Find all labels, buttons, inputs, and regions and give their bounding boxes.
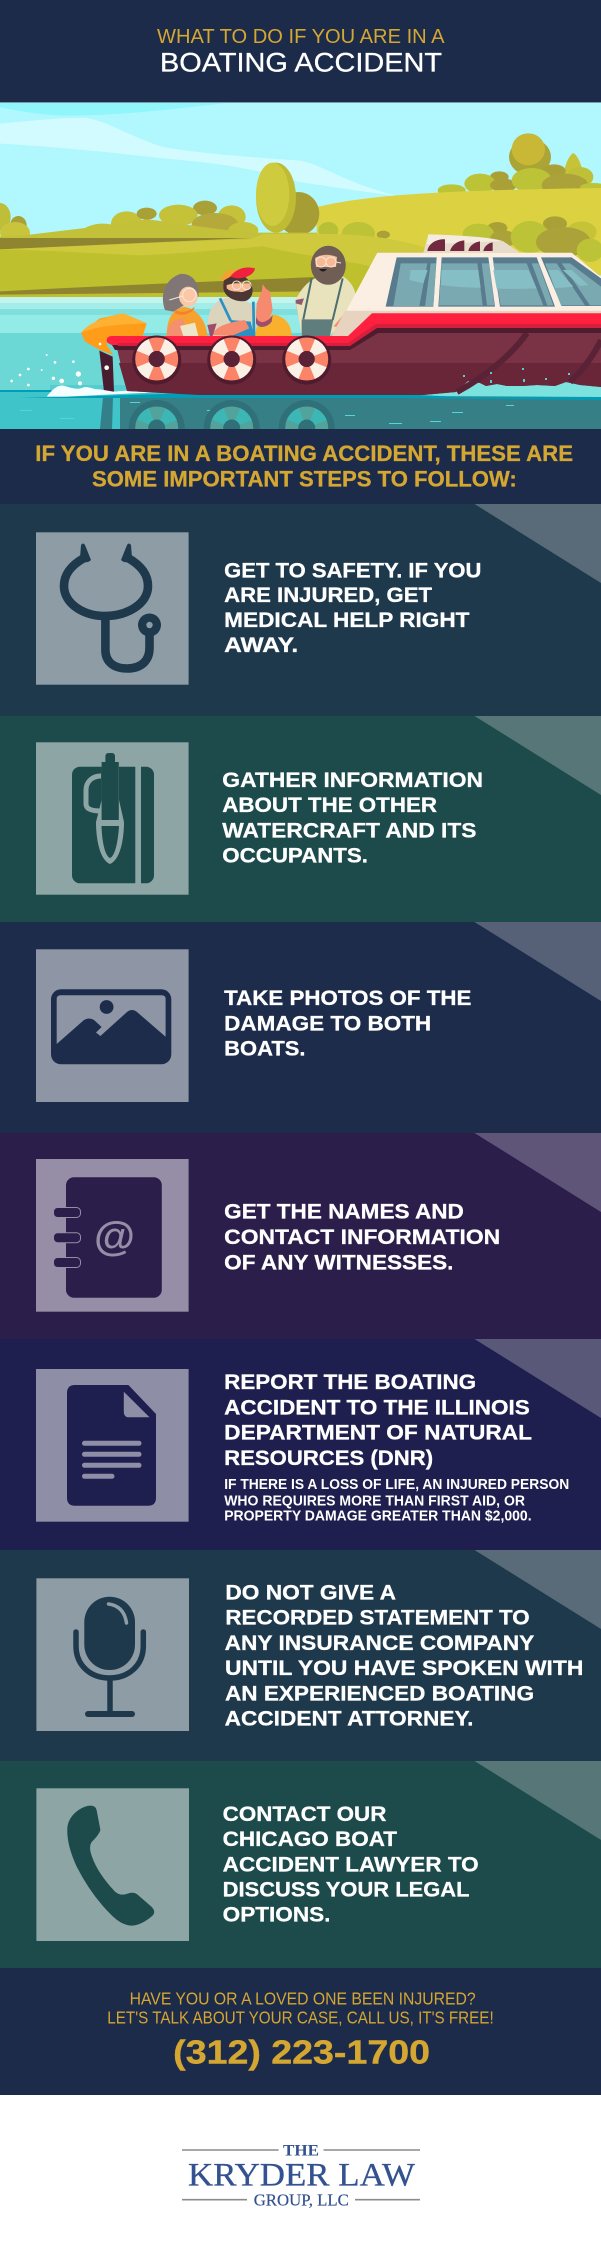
call to action text: LET'S TALK ABOUT YOUR CASE, CALL US, IT'S FREE! (107, 2007, 494, 2027)
icon: notebook and pen (72, 753, 154, 887)
passenger: bearded man (296, 277, 356, 336)
step 3 text: BOATS. (224, 1037, 306, 1061)
step 5 text: WHO REQUIRES MORE THAN FIRST AID, OR (224, 1493, 526, 1509)
step 3 text (224, 986, 471, 1061)
title: BOATING ACCIDENT (160, 48, 442, 78)
icon: address book (54, 1177, 162, 1298)
step 1 text: ARE INJURED, GET (224, 583, 432, 607)
step 5 text (224, 1370, 569, 1524)
passenger: man with red cap (207, 267, 292, 336)
step 2 text: OCCUPANTS. (222, 844, 368, 868)
heading: SOME IMPORTANT STEPS TO FOLLOW: (92, 467, 517, 492)
panel: step 6 recorded statement (0, 1550, 601, 1761)
step 2 text: ABOUT THE OTHER (222, 793, 437, 817)
step 4 text: GET THE NAMES AND (224, 1199, 464, 1223)
step 5 text: RESOURCES (DNR) (224, 1446, 433, 1470)
icon: address book: @ (94, 1213, 135, 1259)
panel: step 3 take photos (0, 922, 601, 1133)
phone number: (312) 223-1700 (173, 2034, 430, 2071)
ring reflections (128, 400, 334, 429)
step 1 text (224, 558, 481, 657)
step 5 text: REPORT THE BOATING (224, 1370, 476, 1394)
step 7 text: OPTIONS. (223, 1903, 330, 1927)
hull (112, 320, 601, 395)
step 4 text: OF ANY WITNESSES. (224, 1250, 453, 1274)
cabin windows (386, 257, 601, 307)
heading: IF YOU ARE IN A BOATING ACCIDENT, THESE ARE (35, 441, 573, 466)
life ring 2 (207, 336, 256, 384)
life ring 3 (282, 336, 331, 384)
step 5 text: ACCIDENT TO THE ILLINOIS (224, 1396, 530, 1420)
step 2 text (222, 768, 483, 868)
logo: The Kryder Law Group (182, 2143, 420, 2210)
step 7 text: ACCIDENT LAWYER TO (223, 1853, 479, 1877)
step 1 text: GET TO SAFETY. IF YOU (224, 558, 481, 582)
cabin roof (423, 234, 520, 253)
step 4 text: CONTACT INFORMATION (224, 1225, 500, 1249)
sky clouds and left shrubs (0, 103, 397, 243)
step 5 text: PROPERTY DAMAGE GREATER THAN $2,000. (224, 1508, 532, 1524)
call to action band (0, 1968, 601, 2095)
panel: step 5 report the accident (0, 1339, 601, 1550)
trees and near hills (0, 163, 433, 297)
step 6 text: ANY INSURANCE COMPANY (225, 1631, 534, 1655)
passengers (163, 267, 356, 336)
step 2 text: GATHER INFORMATION (222, 768, 483, 792)
red gunwale stripe (107, 313, 601, 346)
step 6 text: AN EXPERIENCED BOATING (225, 1681, 534, 1705)
cabin body (345, 253, 601, 313)
heading (35, 441, 573, 492)
panel: step 1 get to safety (0, 504, 601, 716)
motor boat (107, 234, 601, 395)
panel: step 7 contact lawyer (0, 1761, 601, 1968)
step 6 text: DO NOT GIVE A (225, 1580, 396, 1604)
step 4 text (224, 1199, 500, 1274)
call to action text (107, 1989, 494, 2027)
icon: stethoscope (64, 544, 161, 668)
step 1 text: AWAY. (224, 633, 298, 657)
step 1 text: MEDICAL HELP RIGHT (224, 608, 470, 632)
step 7 text: CHICAGO BOAT (223, 1827, 397, 1851)
passenger: woman (163, 274, 207, 336)
head of bearded man (311, 246, 346, 285)
step 6 text: ACCIDENT ATTORNEY. (225, 1707, 473, 1731)
logo: The Kryder Law Group: GROUP, LLC (254, 2191, 349, 2210)
step 6 text: UNTIL YOU HAVE SPOKEN WITH (225, 1656, 583, 1680)
icon: picture (51, 989, 171, 1064)
outboard motor and splash (10, 313, 154, 397)
step 5 text: IF THERE IS A LOSS OF LIFE, AN INJURED PERSON (224, 1477, 569, 1493)
far right hills and shrubs (317, 133, 601, 275)
panel: step 2 gather information (0, 716, 601, 922)
step 5 text: DEPARTMENT OF NATURAL (224, 1421, 532, 1445)
hero illustration: boat on a lake (0, 102, 601, 456)
life ring 1 (132, 336, 181, 384)
step 2 text: WATERCRAFT AND ITS (222, 819, 476, 843)
step 3 text: TAKE PHOTOS OF THE (224, 986, 471, 1010)
logo: The Kryder Law Group: KRYDER LAW (188, 2157, 415, 2193)
step 7 text (223, 1802, 479, 1927)
logo: The Kryder Law Group: THE (283, 2143, 319, 2160)
title: WHAT TO DO IF YOU ARE IN A (157, 26, 445, 48)
icon: telephone (67, 1806, 154, 1926)
step 7 text: DISCUSS YOUR LEGAL (223, 1878, 470, 1902)
icon: microphone (76, 1597, 143, 1714)
icon: document (67, 1385, 156, 1506)
panel: step 4 witnesses (0, 1133, 601, 1339)
step 3 text: DAMAGE TO BOTH (224, 1012, 431, 1036)
call to action text: HAVE YOU OR A LOVED ONE BEEN INJURED? (130, 1989, 476, 2009)
step 6 text: RECORDED STATEMENT TO (225, 1605, 530, 1629)
header banner (0, 0, 601, 102)
title (157, 26, 445, 78)
step 6 text (225, 1580, 583, 1731)
water (0, 297, 601, 429)
step 7 text: CONTACT OUR (223, 1802, 387, 1826)
steps heading band (0, 429, 601, 504)
